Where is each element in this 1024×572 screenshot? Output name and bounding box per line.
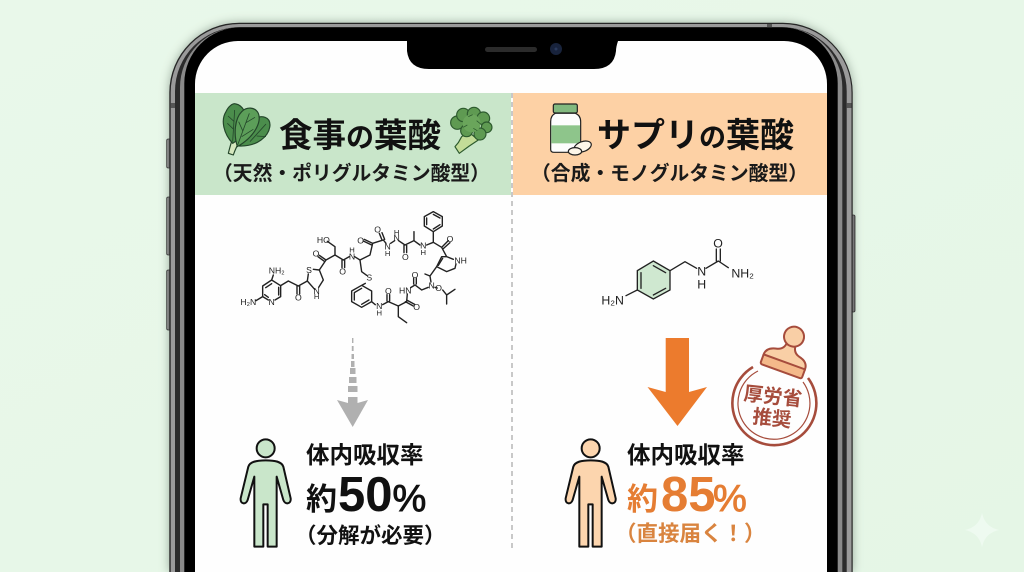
arrow: orange [648, 338, 707, 426]
icon: sparkle [965, 513, 999, 547]
panel: right header [513, 93, 827, 195]
text block: absorption 85%: 85 [661, 468, 716, 522]
chart: complex polyglutamate molecule: N [420, 241, 426, 251]
chart: complex polyglutamate molecule: O [447, 234, 454, 244]
chart: complex polyglutamate molecule: H [377, 309, 382, 318]
notch [400, 38, 625, 69]
chart: complex polyglutamate molecule: N [349, 251, 355, 261]
phone screen [195, 41, 827, 572]
subheading: left type: （天然・ポリグルタミン酸型） [213, 162, 490, 185]
chart: complex polyglutamate molecule: H₂N [240, 297, 256, 307]
chart: complex polyglutamate molecule: O [402, 252, 409, 262]
chart: complex polyglutamate molecule: H [385, 249, 390, 258]
stamp text: 推奨 [751, 406, 792, 432]
text block: absorption 50%: 50 [338, 468, 393, 522]
stamp text [743, 383, 803, 432]
text block: absorption 50%: 体内吸収率 [306, 442, 424, 468]
icon: spinach [223, 104, 270, 155]
icon: broccoli [451, 107, 492, 153]
phone frame [167, 23, 855, 572]
chart: complex polyglutamate molecule: O [339, 267, 346, 277]
icon: person green [241, 439, 291, 547]
chart: simple monoglutamate molecule: O [713, 237, 723, 251]
icon: person orange [566, 439, 616, 547]
heading: サプリの葉酸: サプリの葉酸 [597, 117, 794, 155]
icon: stamp [732, 320, 818, 445]
chart: complex polyglutamate molecule: N [385, 241, 391, 251]
text block: absorption 85%: （直接届く！） [615, 522, 766, 546]
chart: complex polyglutamate molecule: N [376, 301, 382, 311]
text block: absorption 50%: 約 [306, 482, 337, 517]
chart: complex polyglutamate molecule: H [421, 248, 426, 257]
icon: supplement bottle [551, 104, 593, 155]
text block: absorption 85%: % [713, 478, 747, 520]
text block: absorption 50%: % [392, 478, 426, 520]
divider [511, 93, 513, 552]
side buttons [167, 139, 855, 330]
chart: complex polyglutamate molecule: O [374, 225, 381, 235]
chart: complex polyglutamate molecule: O [413, 302, 420, 312]
chart: complex polyglutamate molecule: N [269, 297, 275, 307]
chart: simple monoglutamate molecule: N [697, 265, 706, 279]
subheading: right type: （合成・モノグルタミン酸型） [531, 162, 808, 185]
chart: complex polyglutamate molecule: O [357, 235, 364, 245]
chart: complex polyglutamate molecule: N [394, 233, 400, 243]
stamp text: 厚労省 [743, 383, 803, 411]
antenna marks [767, 24, 772, 27]
text block: absorption 85%: 体内吸収率 [627, 442, 744, 468]
chart: complex polyglutamate molecule: S [306, 265, 312, 275]
arrow: gray dashed [337, 338, 368, 427]
chart: complex polyglutamate molecule: H [314, 292, 319, 301]
chart: complex polyglutamate molecule: N [314, 286, 320, 296]
chart: simple monoglutamate molecule: H₂N [601, 293, 624, 307]
chart: complex polyglutamate molecule: N [429, 281, 435, 291]
chart: complex polyglutamate molecule: H [394, 228, 399, 237]
text block: absorption 50%: （分解が必要） [295, 523, 446, 548]
text block: absorption 85%: 約 [627, 482, 658, 517]
chart: complex polyglutamate molecule: O [435, 283, 442, 293]
chart: simple monoglutamate molecule: NH₂ [731, 266, 754, 280]
heading: 食事の葉酸: 食事の葉酸 [279, 118, 442, 155]
chart: complex polyglutamate molecule: O [412, 270, 419, 280]
chart: simple monoglutamate molecule [601, 237, 754, 307]
chart: complex polyglutamate molecule: S [366, 272, 372, 282]
chart: complex polyglutamate molecule: HN [399, 286, 412, 296]
chart: complex polyglutamate molecule: HO [317, 235, 330, 245]
text block: absorption 50% [295, 442, 446, 548]
chart: complex polyglutamate molecule: NH₂ [269, 265, 285, 275]
panel: left header [195, 93, 511, 195]
chart: complex polyglutamate molecule: H [349, 246, 355, 255]
chart: complex polyglutamate molecule: NH [454, 256, 467, 266]
text block: absorption 85% [615, 442, 766, 546]
chart: simple monoglutamate molecule: H [697, 277, 706, 291]
chart: complex polyglutamate molecule [240, 212, 467, 323]
chart: complex polyglutamate molecule: O [295, 292, 302, 302]
chart: complex polyglutamate molecule: O [385, 286, 392, 296]
chart: complex polyglutamate molecule: O [313, 249, 320, 259]
